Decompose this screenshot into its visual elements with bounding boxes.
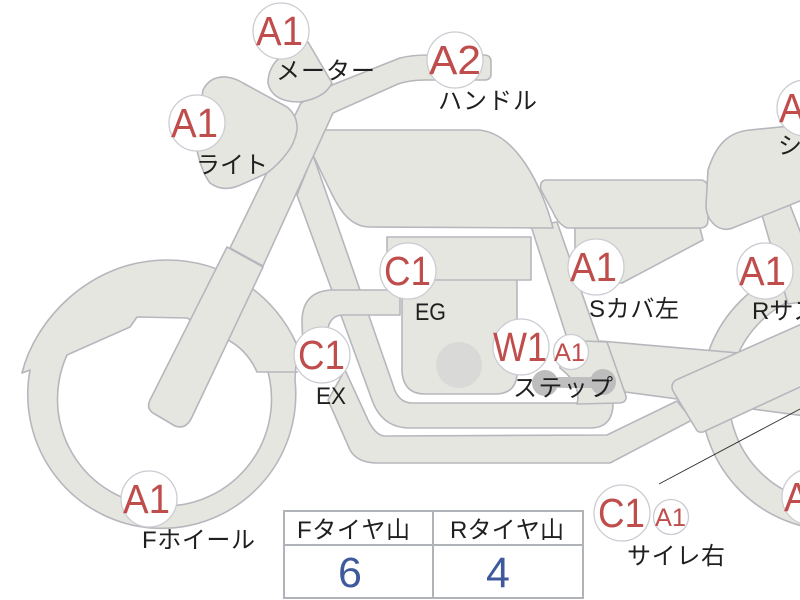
fender lower edge — [268, 371, 298, 373]
swing arm — [600, 341, 800, 418]
meter — [268, 42, 332, 102]
front tyre value: 6 — [338, 549, 362, 597]
seat — [706, 125, 800, 229]
seat side panel — [540, 180, 708, 228]
exhaust header — [302, 290, 400, 350]
step plate — [560, 340, 626, 404]
rear tyre header: Rタイヤ山 — [450, 517, 564, 544]
label: exhaust: EX — [316, 383, 346, 410]
engine circle — [436, 342, 482, 388]
motorcycle diagram — [22, 42, 800, 530]
badge: handle A2: A2 — [429, 37, 481, 83]
label: step: ステップ — [513, 375, 613, 402]
front fork upper and handlebar — [230, 55, 491, 266]
label: handle: ハンドル — [438, 88, 537, 115]
badge: step A1: A1 — [554, 339, 585, 367]
engine upper — [387, 237, 531, 280]
step bar — [532, 369, 616, 396]
table: tyre tread — [284, 511, 583, 598]
leader line — [659, 409, 800, 484]
label: front wheel: Fホイール — [142, 527, 255, 554]
rear wheel — [701, 262, 800, 530]
rear suspension strut — [762, 205, 800, 304]
label: side cover: Sカバ左 — [589, 296, 679, 323]
headlight — [195, 77, 297, 188]
engine lower — [402, 278, 517, 394]
front tyre header: Fタイヤ山 — [297, 517, 410, 544]
badge: side cover A1: A1 — [570, 244, 617, 290]
badge: front wheel A1: A1 — [123, 476, 170, 522]
side cover left — [575, 228, 703, 283]
badge: step A1 — [554, 334, 588, 370]
lower exhaust pipe — [328, 370, 692, 463]
badge: muffler A1: A1 — [655, 504, 686, 532]
badge: meter A1: A1 — [256, 8, 303, 54]
label: meter: メーター — [276, 58, 375, 85]
badge: engine C1: C1 — [384, 248, 431, 294]
label: engine: EG — [415, 299, 446, 326]
rear sub-frame strut — [531, 222, 600, 360]
badge: step W1: W1 — [493, 324, 547, 370]
badge: exhaust C1: C1 — [298, 332, 345, 378]
badge: muffler C1: C1 — [598, 490, 645, 536]
front wheel and fender — [22, 260, 297, 528]
front fork lower — [149, 247, 263, 427]
fuel tank — [313, 130, 553, 228]
badge: muffler A1 — [654, 500, 688, 534]
label: muffler: サイレ右 — [627, 543, 725, 570]
frame down tube and cradle — [297, 155, 613, 428]
badge: light A1: A1 — [171, 100, 218, 146]
badge: rear suspension A1: A1 — [739, 248, 786, 294]
rear shock — [672, 318, 800, 432]
label: light: ライト — [196, 152, 268, 179]
rear tyre value: 4 — [486, 549, 510, 597]
